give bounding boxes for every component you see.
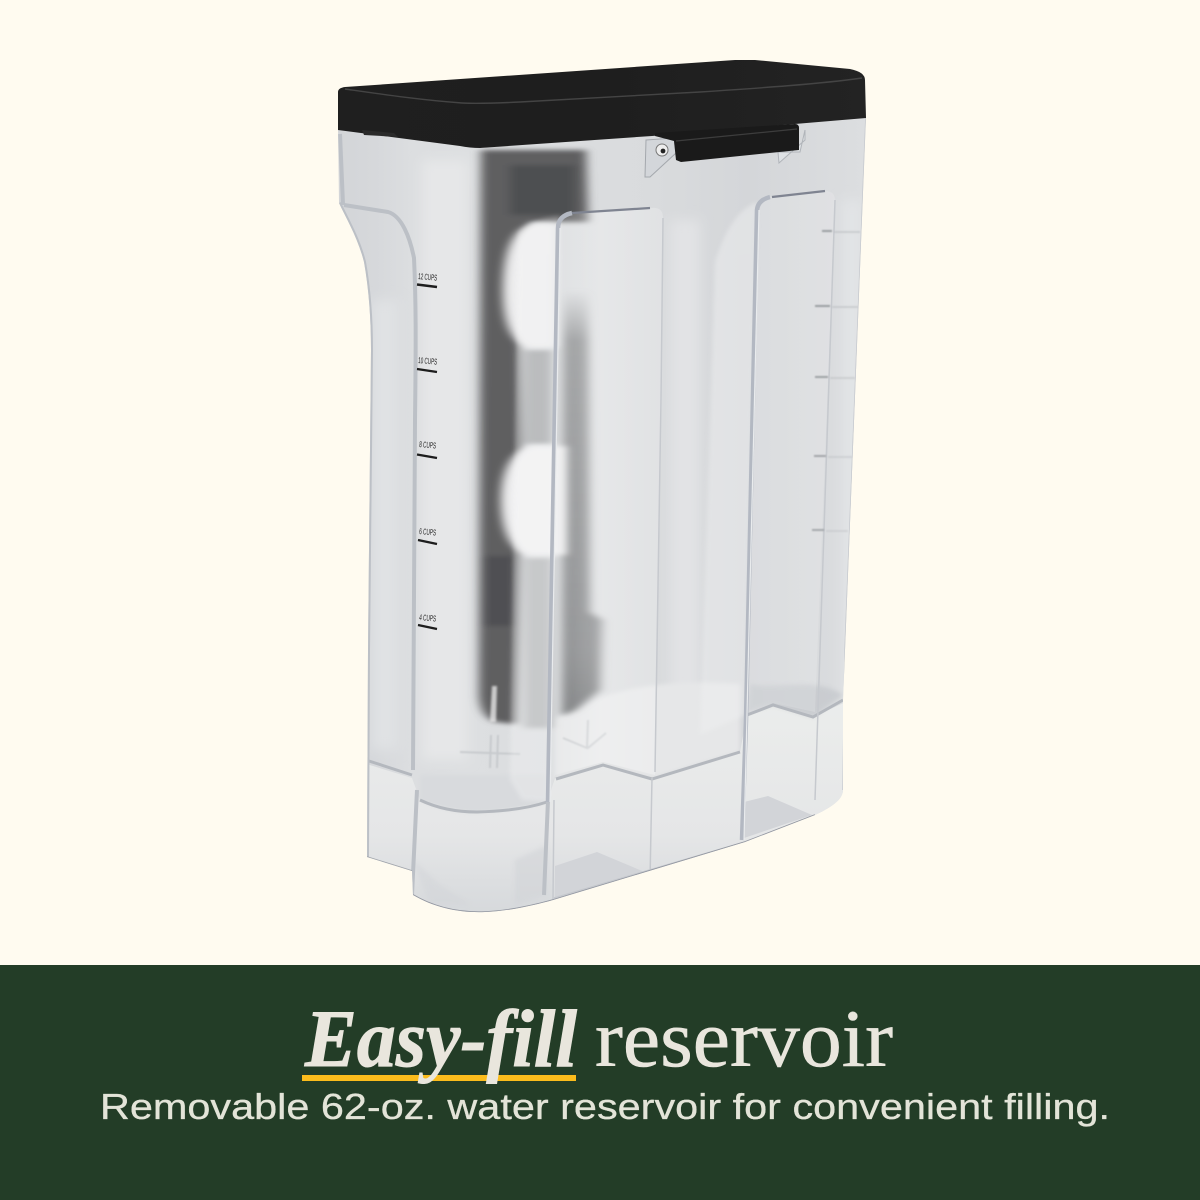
white filter discs xyxy=(503,224,556,347)
lid corner shading xyxy=(486,106,490,146)
lid handle xyxy=(655,124,799,162)
4 cups mark xyxy=(418,612,437,629)
subheading: Removable 62-oz. water reservoir for convenient filling. xyxy=(100,1086,1110,1127)
soft light bands xyxy=(378,166,696,754)
water-line ledges xyxy=(369,700,843,812)
right hinge clip xyxy=(778,130,805,163)
base dark-floor facets xyxy=(518,796,812,894)
12 cups mark xyxy=(417,271,438,287)
lid xyxy=(338,60,866,148)
front left pane xyxy=(558,210,650,750)
heading emphasis: Easy-fill xyxy=(304,993,577,1084)
reservoir transparent body xyxy=(330,110,870,925)
floor posts xyxy=(460,720,606,768)
8 cups mark: 8 CUPS xyxy=(419,439,437,450)
heading xyxy=(302,993,893,1084)
heading remainder: reservoir xyxy=(595,993,893,1084)
left latch xyxy=(362,130,398,137)
cup scale markings xyxy=(417,271,438,629)
12 cups mark: 12 CUPS xyxy=(418,271,438,283)
right channel pane xyxy=(745,191,835,715)
internal filter: dark core xyxy=(474,150,602,728)
heading underline xyxy=(302,1075,576,1081)
top edges of channels xyxy=(572,191,825,213)
bottom edge xyxy=(413,815,815,912)
structural lines xyxy=(339,134,548,895)
10 cups mark: 10 CUPS xyxy=(418,355,438,367)
floor reflections xyxy=(555,682,740,778)
left hinge clip xyxy=(645,138,676,177)
caption band xyxy=(0,965,1200,1200)
10 cups mark xyxy=(417,355,438,372)
rear scale marks seen through body xyxy=(812,231,860,531)
lower base (below water line) xyxy=(369,704,843,862)
8 cups mark xyxy=(417,439,437,458)
4 cups mark: 4 CUPS xyxy=(419,612,437,623)
pin at bottom of core xyxy=(490,686,497,722)
6 cups mark xyxy=(418,526,437,544)
product: water reservoir xyxy=(330,60,870,925)
lid top surface highlight edge xyxy=(345,78,862,103)
6 cups mark: 6 CUPS xyxy=(419,526,437,537)
